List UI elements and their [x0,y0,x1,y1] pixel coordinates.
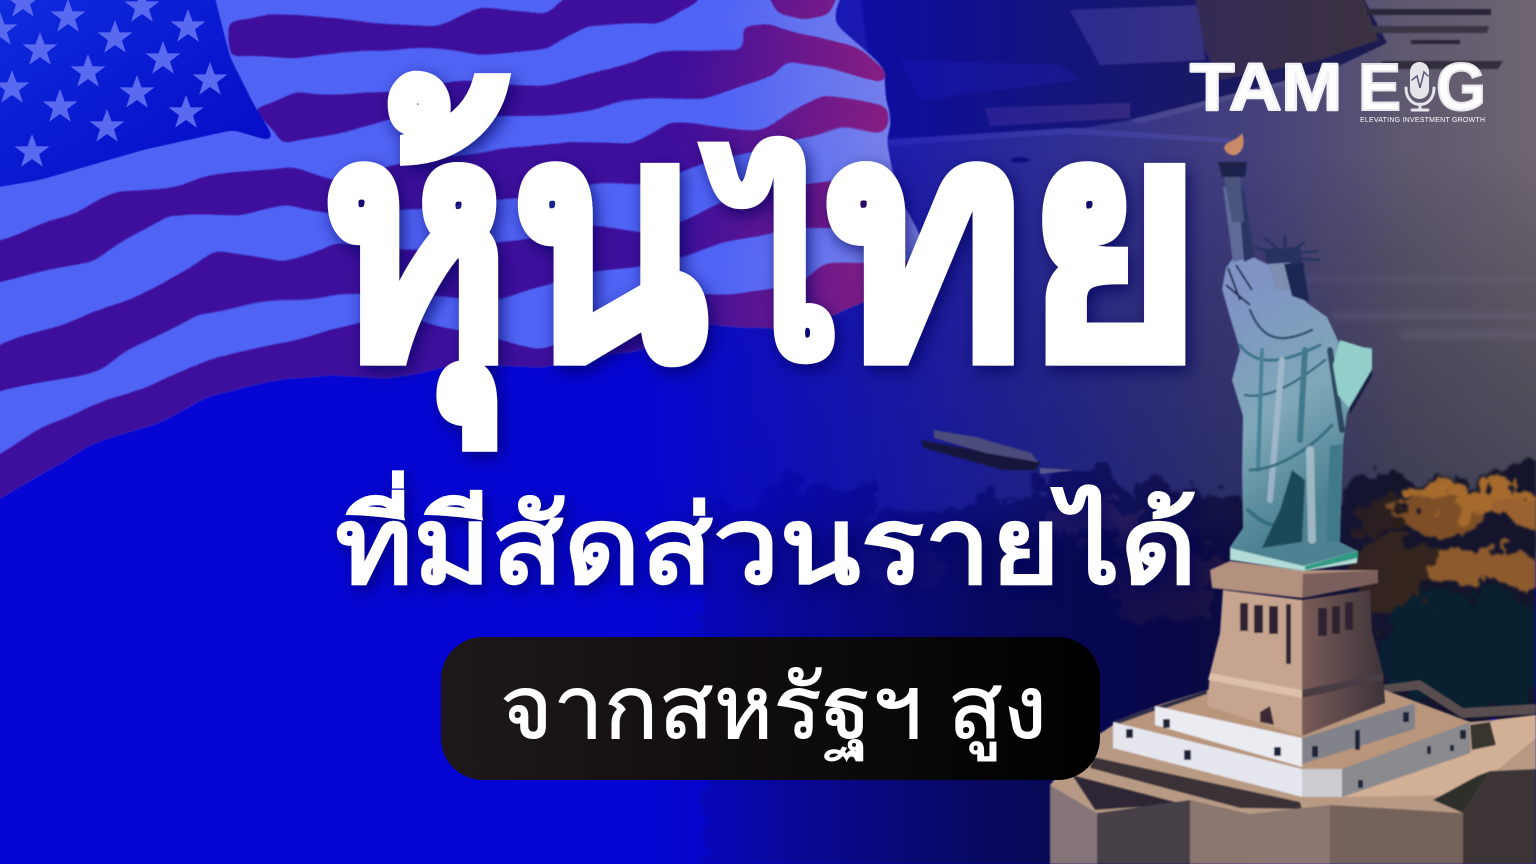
logo: TAM EIG: ELEVATING INVESTMENT GROWTH [1360,117,1485,124]
water reflections [1300,277,1536,339]
city skyline at top [860,0,1503,163]
canton with stars [0,0,277,192]
subtitle: ที่มีสัดส่วนรายได้ [335,470,1197,606]
black pill [441,637,1100,780]
logo: TAM EIG: TAM [1190,50,1342,125]
flag cloth with stripes [0,0,941,515]
logo: TAM EIG: G [1436,50,1486,125]
robe folds [1240,310,1342,540]
title: main heading [322,57,1202,449]
ground and fort [1050,680,1536,864]
tablet [1333,340,1372,408]
icon: microphone [1406,62,1434,110]
plinth [1230,548,1358,571]
sleeve folds [1226,265,1252,305]
statue of liberty [1113,133,1470,797]
pill label: จากสหรัฐฯ สูง [500,658,1047,762]
title: main heading: ไ [700,137,840,406]
ferry boat [921,430,1075,474]
pedestal [1207,561,1385,736]
island base tiers [1113,690,1470,797]
title: main heading: หุ้น [322,57,708,449]
statue figure [1218,133,1372,571]
forest [700,462,1536,864]
logo: TAM EIG [1190,50,1486,125]
arm and torch [1223,187,1253,262]
logo: TAM EIG: E [1358,50,1401,125]
dark tint lower centre [660,530,1290,864]
american flag [0,0,941,515]
head and crown [1268,262,1291,290]
title: main heading: ทย [826,57,1202,426]
